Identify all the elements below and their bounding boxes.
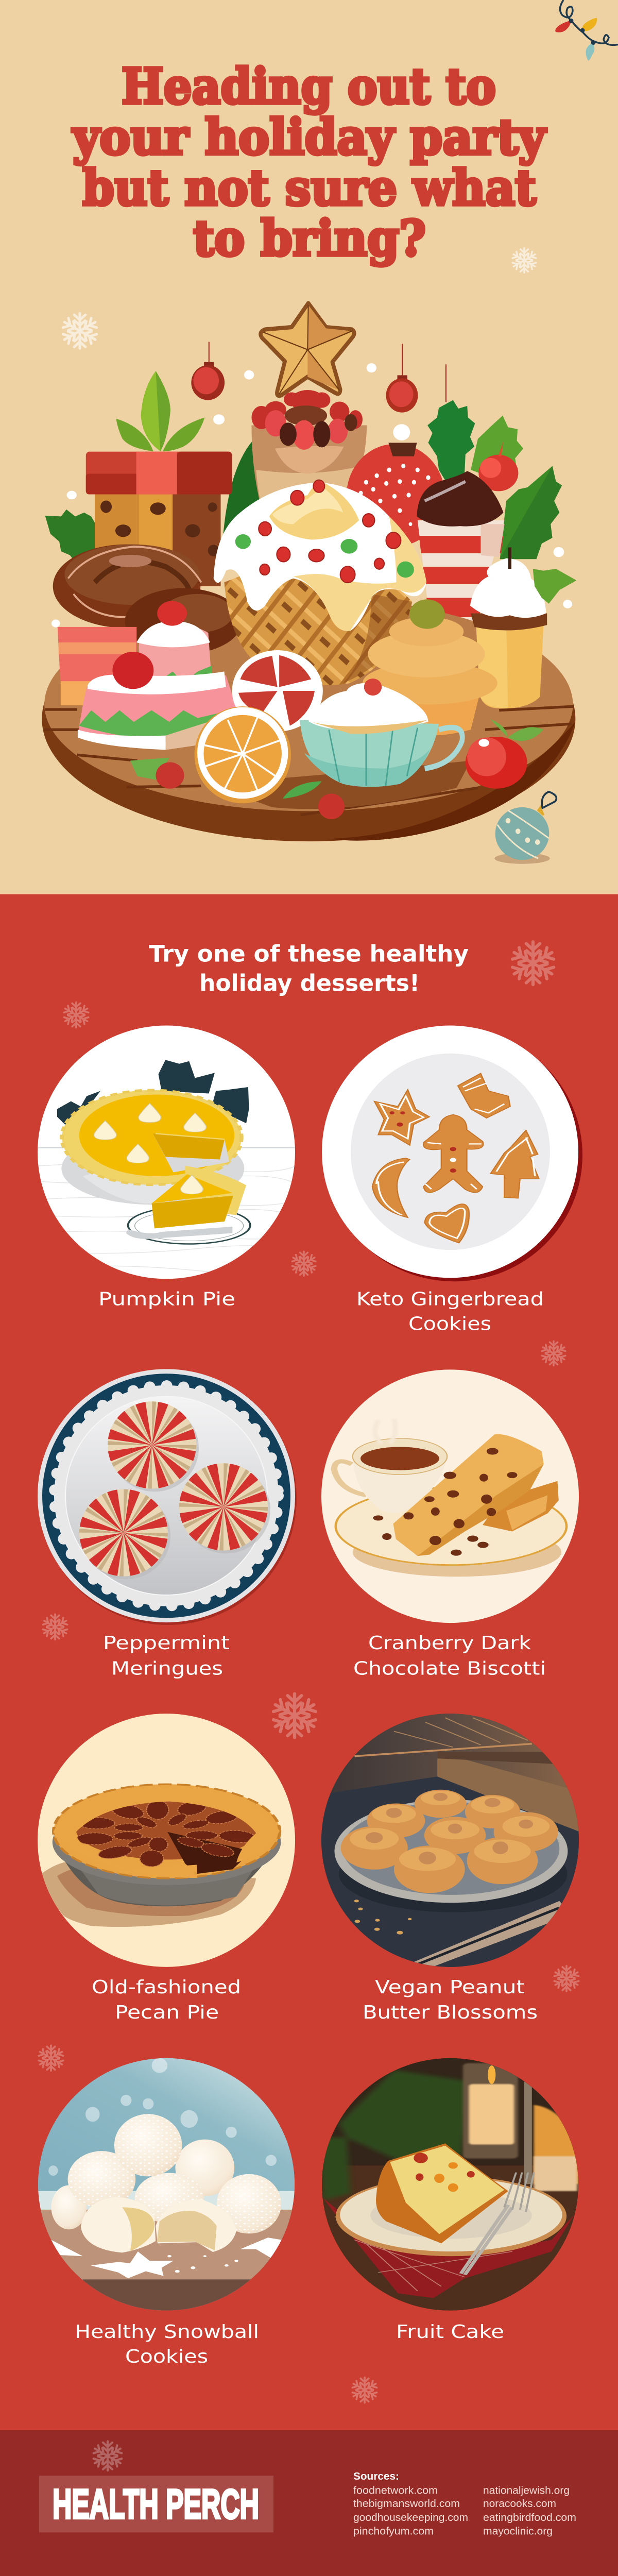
label: Keto Gingerbread Cookies: Cookies [408,1314,491,1335]
fruit bowl [251,390,367,509]
label: Cranberry Dark Chocolate Biscotti: Cranberry Dark [368,1633,531,1654]
label: Keto Gingerbread Cookies: Keto Gingerbread [356,1289,544,1310]
back right holly [427,400,562,559]
label: Pumpkin Pie: Pumpkin Pie [98,1289,235,1310]
label: Old-fashioned Pecan Pie [92,1977,241,2023]
label: Peppermint Meringues: Peppermint [103,1633,230,1654]
star cookie [261,303,354,396]
sources list: mayoclinic.org [483,2526,553,2537]
right cupcake [470,548,576,708]
sources list [353,2470,576,2537]
gift box [86,452,232,586]
icon: large snowflake [272,1694,317,1738]
main cake with icing [214,480,426,685]
blue bauble [494,792,556,864]
label: Peppermint Meringues [103,1633,230,1679]
label: Old-fashioned Pecan Pie: Old-fashioned [92,1977,241,1998]
icon: snowflake [351,2378,378,2403]
icon: snowflake [553,1966,580,1991]
icon: string of holiday lights [555,0,618,61]
label: Peppermint Meringues: Meringues [111,1658,223,1679]
chocolate striped cup [417,471,505,633]
chocolate pastries [53,545,242,654]
green leaves on gift [116,371,205,451]
label: Healthy Snowball Cookies: Cookies [125,2346,208,2367]
fruit cake illustration [319,2056,583,2312]
card: peppermint meringues [38,1369,297,1625]
sources list: goodhousekeeping.com [353,2512,468,2523]
card: keto gingerbread cookies [322,1026,582,1281]
card: healthy snowball cookies [36,2056,299,2312]
panel: dark red footer background [0,2430,618,2576]
icon: snowflake [42,1614,68,1639]
card: vegan peanut butter blossoms [319,1711,583,1978]
panel: cream hero background [0,0,618,894]
label: Keto Gingerbread Cookies [356,1289,544,1335]
logo: Health Perch [39,2476,273,2532]
sources list: foodnetwork.com [353,2485,438,2497]
icon: snowflake [541,1341,566,1365]
big green leaf [222,441,264,544]
icon: snowflake by title [511,248,537,273]
title: Heading out to [122,58,496,115]
whipped cream mug [300,679,462,787]
section heading [149,941,469,997]
label: Cranberry Dark Chocolate Biscotti [353,1633,546,1679]
title: to bring? [193,210,426,267]
sources list: thebigmansworld.com [353,2498,460,2510]
title [72,58,547,267]
wooden board [42,596,575,841]
meringue right [179,1463,270,1553]
hanging ornaments and snow dots [52,342,572,628]
sources list: eatingbirdfood.com [483,2512,576,2523]
label: Vegan Peanut Butter Blossoms: Vegan Peanut [375,1977,525,1998]
pink layered cake [78,601,236,750]
icon: snowflake left of hero [62,313,98,348]
sources list: noracooks.com [483,2498,556,2510]
pecan pie illustration [41,1784,281,1927]
golden pastry stack [363,599,497,736]
title: your holiday party [72,109,547,166]
icon: snowflake [291,1251,317,1276]
label: Healthy Snowball Cookies: Healthy Snowball [75,2321,259,2343]
card: pumpkin pie [38,1026,296,1279]
label: Fruit Cake: Fruit Cake [396,2321,504,2343]
card: old-fashioned pecan pie [38,1714,295,1967]
icon: footer snowflake [93,2442,123,2470]
pumpkin pie illustration [38,1060,296,1274]
snowball cookies illustration [36,2056,299,2312]
grapefruit slice [232,650,323,732]
section heading: holiday desserts! [199,970,420,997]
apple and berries [130,719,543,819]
label: Cranberry Dark Chocolate Biscotti: Chocolate Biscotti [353,1658,546,1679]
panel: red desserts background [0,894,618,2430]
striped cake slice [58,627,136,705]
biscotti illustration [334,1419,566,1577]
sources list: nationaljewish.org [483,2485,570,2497]
gingerbread plate illustration [351,1054,550,1250]
red polka-dot ornament [347,443,444,546]
icon: large snowflake by heading [511,942,555,985]
section heading: Try one of these healthy [149,941,469,968]
sources list: Sources: [353,2470,399,2482]
meringue top [108,1401,199,1492]
label: Vegan Peanut Butter Blossoms: Butter Blossoms [363,2002,538,2023]
icon: snowflake [38,2045,64,2071]
peanut butter blossoms oven illustration [319,1711,583,1978]
meringue left [79,1489,170,1579]
sources list: pinchofyum.com [353,2526,434,2537]
title: but not sure what [82,160,536,216]
label: Healthy Snowball Cookies [75,2321,259,2367]
icon: snowflake [63,1002,90,1027]
orange slice [195,706,291,803]
logo: Health Perch: HEALTH PERCH [53,2481,259,2528]
card: cranberry dark chocolate biscotti [321,1369,579,1623]
label: Vegan Peanut Butter Blossoms [363,1977,538,2023]
label: Old-fashioned Pecan Pie: Pecan Pie [115,2002,219,2023]
hero illustration: dessert platter [42,303,576,864]
card: fruit cake [319,2056,583,2312]
left holly leaf [45,510,116,565]
